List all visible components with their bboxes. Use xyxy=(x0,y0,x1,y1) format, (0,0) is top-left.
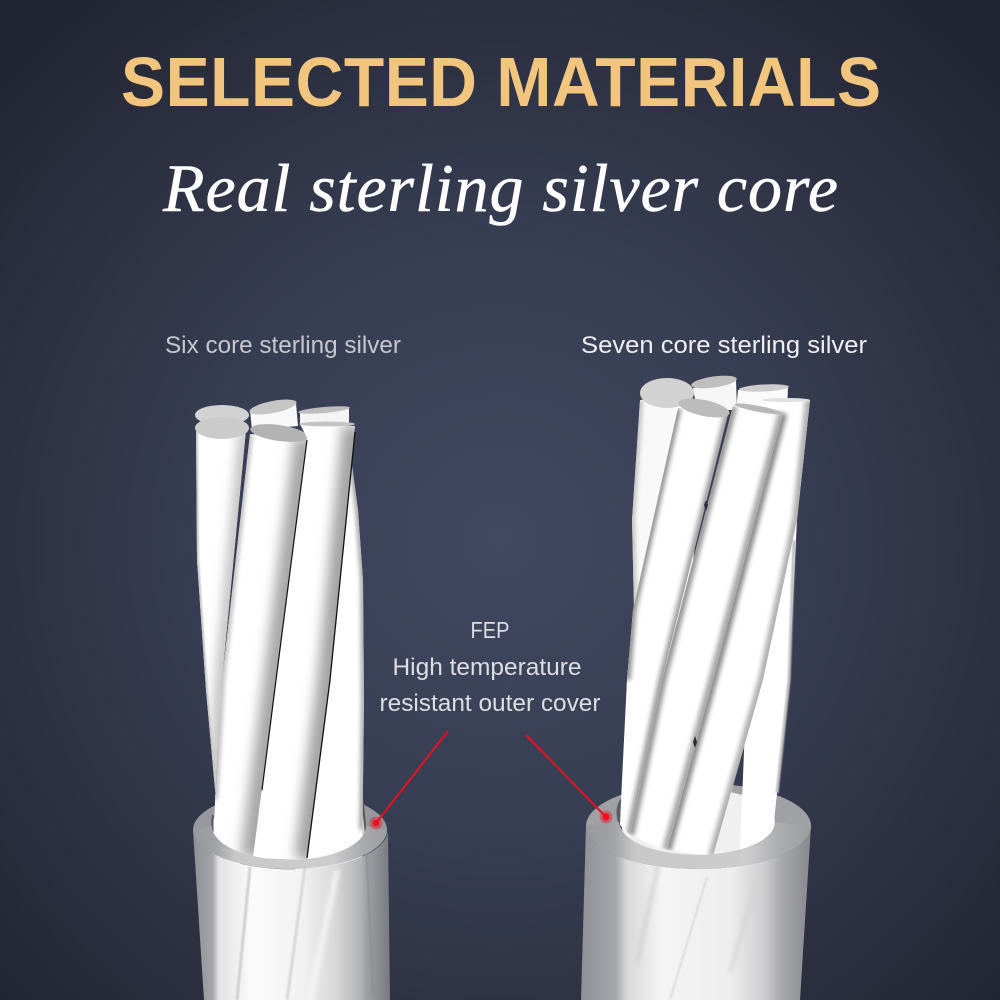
front strand xyxy=(253,422,355,860)
diagram: six core cable xyxy=(193,397,390,1000)
left strand xyxy=(195,417,249,870)
outer cover xyxy=(193,826,390,1000)
callout text: FEP high temperature resistant outer cover xyxy=(380,617,600,717)
diagram: seven core cable xyxy=(581,373,811,1000)
back rim of cover xyxy=(193,791,387,869)
callout text: FEP high temperature resistant outer cover: FEP xyxy=(470,617,510,643)
front left strand xyxy=(620,395,731,835)
far right strand xyxy=(295,465,364,870)
callout text: FEP high temperature resistant outer cover: resistant outer cover xyxy=(380,690,600,717)
subtitle: real sterling silver core: Real sterling silver core xyxy=(162,150,838,226)
right back strand xyxy=(740,520,797,852)
back strands xyxy=(690,373,789,412)
arrow: right pointer to cover xyxy=(526,735,612,824)
outer cover xyxy=(581,822,811,1000)
middle strand xyxy=(212,421,309,858)
back strands xyxy=(195,397,350,430)
front centre strand xyxy=(630,401,784,850)
arrow: left pointer to cover xyxy=(370,731,448,830)
back rim of cover xyxy=(586,783,811,869)
strand gaps xyxy=(693,500,708,748)
label: seven core sterling silver: Seven core sterling silver xyxy=(581,332,867,359)
title: selected materials: SELECTED MATERIALS xyxy=(121,43,881,121)
far right strand xyxy=(667,398,810,856)
back left strand xyxy=(622,378,694,830)
callout text: FEP high temperature resistant outer cover: High temperature xyxy=(392,654,582,681)
label: six core sterling silver: Six core sterling silver xyxy=(165,332,401,359)
